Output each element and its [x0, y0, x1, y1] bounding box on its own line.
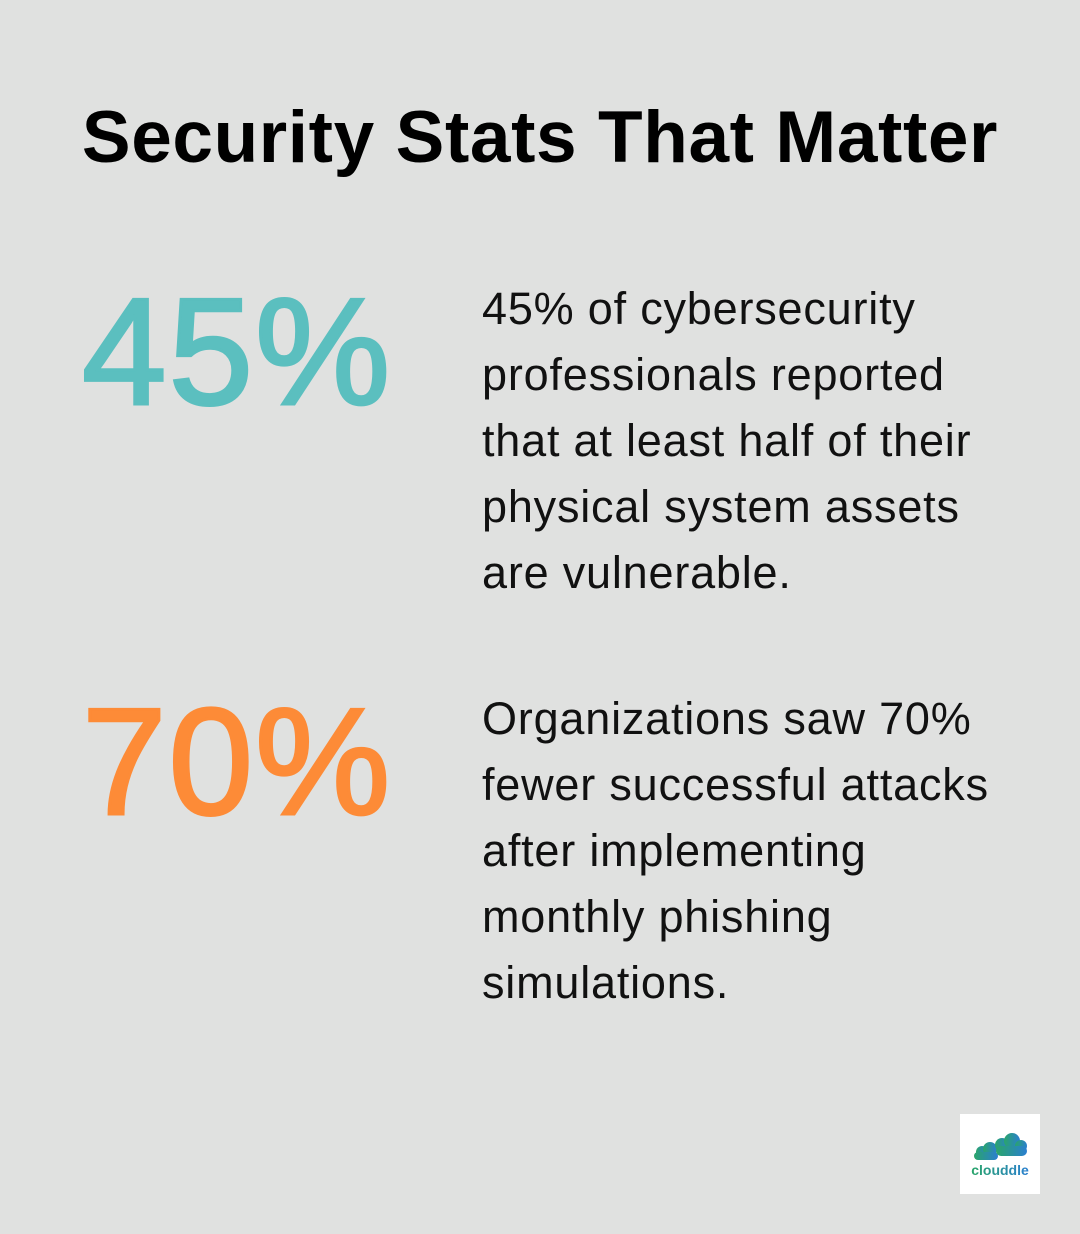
title: Security Stats That Matter: [82, 97, 998, 178]
text: 70% description: [482, 693, 989, 1008]
text: 45% description: are vulnerable.: [482, 547, 792, 598]
text: 70% description: Organizations saw 70%: [482, 693, 972, 744]
text: 70% description: after implementing: [482, 825, 867, 876]
text: 45% description: 45% of cybersecurity: [482, 283, 916, 334]
stat: 70%: 70%: [82, 677, 392, 847]
text: 45% description: physical system assets: [482, 481, 960, 532]
text: 70% description: monthly phishing: [482, 891, 832, 942]
stat: 45%: 45%: [82, 267, 392, 437]
logo: clouddle: clouddle: [971, 1162, 1029, 1178]
text: 70% description: fewer successful attacks: [482, 759, 989, 810]
text: 45% description: [482, 283, 971, 598]
logo: clouddle: [960, 1114, 1040, 1194]
text: 70% description: simulations.: [482, 957, 729, 1008]
text: 45% description: that at least half of their: [482, 415, 971, 466]
text: 45% description: professionals reported: [482, 349, 945, 400]
